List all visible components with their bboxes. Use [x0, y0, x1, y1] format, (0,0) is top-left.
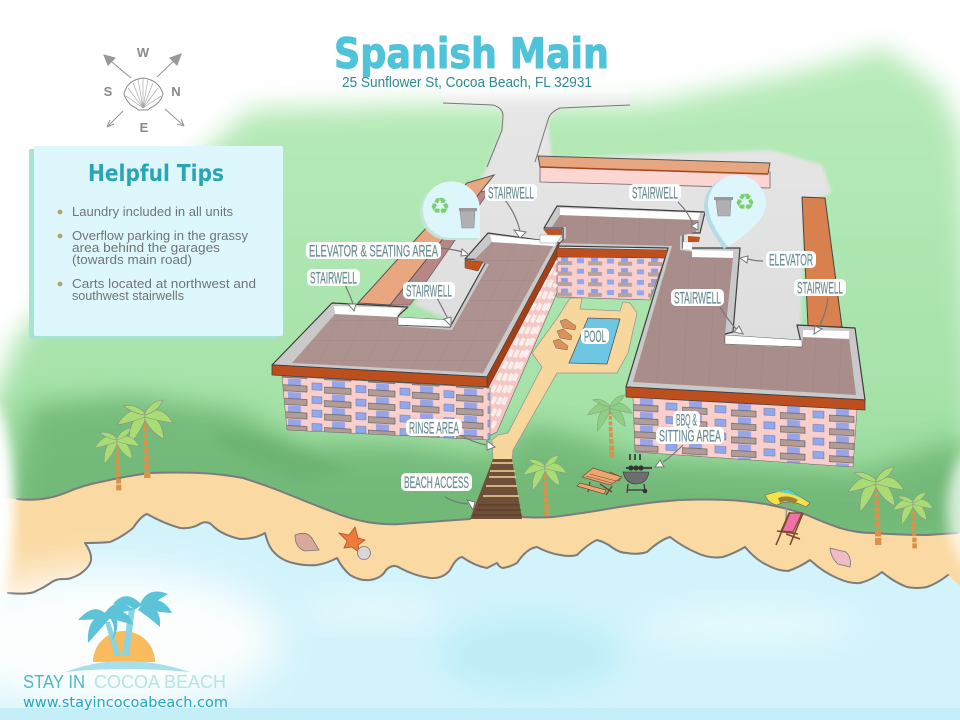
label: pool: POOL	[584, 328, 606, 346]
building: west wing roof	[272, 233, 560, 388]
building: middle wing wall	[557, 255, 665, 300]
label: stairwell north west	[485, 184, 537, 202]
arrow: inner east stairwell	[720, 307, 743, 334]
garage: east	[802, 197, 842, 327]
parking and road	[415, 88, 832, 345]
picnic table	[577, 468, 622, 495]
address: 25 Sunflower St, Cocoa Beach, FL 32931	[342, 75, 592, 91]
arrow: elevator and seating	[440, 248, 469, 256]
arrow: north middle stairwell	[678, 202, 698, 230]
pool	[569, 318, 620, 364]
compass letters: W	[137, 45, 150, 60]
arrow: inner west stairwell	[437, 298, 451, 326]
heading: Helpful Tips	[88, 161, 224, 187]
label: stairwell north east	[629, 184, 681, 202]
tips text: area behind the garages	[72, 241, 220, 255]
panel: helpful tips	[29, 146, 283, 339]
label: beach access	[401, 473, 472, 492]
sand	[0, 472, 960, 600]
label: beach access: BEACH ACCESS	[404, 474, 469, 492]
label: stairwell west	[307, 269, 360, 288]
logo island	[65, 661, 190, 672]
palm tree: small west	[95, 428, 139, 490]
label: stairwell north west: STAIRWELL	[488, 184, 534, 202]
building: west wing side wall	[487, 250, 557, 437]
label: stairwell east: STAIRWELL	[797, 280, 843, 298]
bullets	[58, 210, 62, 286]
label: elevator and seating area	[306, 242, 441, 260]
garage: north	[538, 156, 770, 188]
beach chair	[776, 512, 803, 545]
label: elevator	[766, 251, 816, 270]
label: bbq and sitting area: SITTING AREA	[659, 428, 721, 446]
compass letters: S	[104, 84, 113, 99]
bubble: west trash and recycling	[420, 181, 480, 240]
compass arrows	[104, 54, 184, 127]
logo wordmark: STAY IN	[23, 672, 85, 692]
tips text: Laundry included in all units	[72, 205, 233, 219]
arrow: rinse area	[460, 435, 495, 450]
building: east wing front wall	[633, 397, 857, 467]
garage: west	[358, 175, 494, 305]
compass letters: E	[140, 120, 149, 135]
pool deck and walkway	[492, 298, 637, 460]
label: bbq and sitting area	[656, 411, 724, 446]
starfish	[339, 527, 365, 553]
palm tree: courtyard	[588, 395, 632, 457]
shell: scallop	[358, 546, 370, 560]
label: bbq and sitting area: BBQ &	[676, 412, 697, 430]
arrow: beach access	[445, 497, 475, 510]
arrow: elevator east	[740, 256, 763, 263]
beach umbrella	[765, 489, 810, 520]
label: stairwell inner west: STAIRWELL	[406, 282, 452, 300]
lounge chairs	[553, 319, 576, 350]
label: elevator: ELEVATOR	[769, 252, 813, 270]
label: stairwell west: STAIRWELL	[310, 270, 357, 288]
arrow: east stairwell	[814, 298, 828, 334]
palm tree: large east	[848, 467, 904, 545]
logo palms	[78, 592, 172, 656]
label: stairwell north east: STAIRWELL	[632, 184, 678, 202]
icon: trash can	[459, 208, 477, 228]
label: rinse area	[406, 419, 462, 438]
label: elevator and seating area: ELEVATOR & SEATING AREA	[309, 242, 438, 260]
palm tree: small east	[893, 492, 933, 548]
shoreline outlines	[8, 472, 957, 594]
icon: recycling east: ♻	[735, 190, 755, 216]
palm tree: beach centre	[523, 455, 567, 516]
beach stairs	[470, 459, 522, 519]
building: west wing front wall	[282, 376, 490, 440]
compass letters: N	[171, 84, 181, 99]
arrow: northwest stairwell	[345, 285, 356, 311]
icon: trash can east	[714, 197, 733, 216]
tips text	[72, 205, 256, 303]
water	[0, 514, 960, 720]
arrow: top west stairwell	[505, 200, 526, 238]
compass shell	[124, 78, 163, 110]
icon: recycling: ♻	[430, 194, 450, 220]
logo sun	[93, 631, 155, 662]
title: Spanish Main	[334, 29, 609, 78]
label: pool	[581, 328, 609, 346]
tips text: southwest stairwells	[72, 289, 184, 303]
label: stairwell inner west	[403, 282, 455, 300]
bubble: east trash and recycling	[704, 175, 766, 249]
tips text: (towards main road)	[72, 253, 192, 267]
grass background	[0, 48, 960, 550]
left and right fade	[0, 400, 960, 620]
logo	[23, 592, 228, 711]
tips text: Carts located at northwest and	[72, 277, 256, 291]
palm tree: large west	[117, 400, 173, 478]
label: rinse area: RINSE AREA	[409, 420, 459, 438]
label: stairwell inner east	[671, 289, 724, 308]
compass letters	[104, 45, 181, 135]
logo url: www.stayincocoabeach.com	[23, 695, 228, 711]
label: stairwell inner east: STAIRWELL	[674, 290, 721, 308]
label: stairwell east	[794, 279, 846, 298]
arrow: bbq	[655, 445, 683, 467]
tips text: Overflow parking in the grassy	[72, 229, 249, 243]
shell: conch west	[295, 533, 319, 551]
compass	[104, 45, 184, 135]
building: east wing roof	[540, 206, 865, 410]
shell: conch east	[830, 548, 850, 567]
barbecue grill	[623, 454, 652, 493]
logo: COCOA BEACH	[94, 672, 226, 692]
